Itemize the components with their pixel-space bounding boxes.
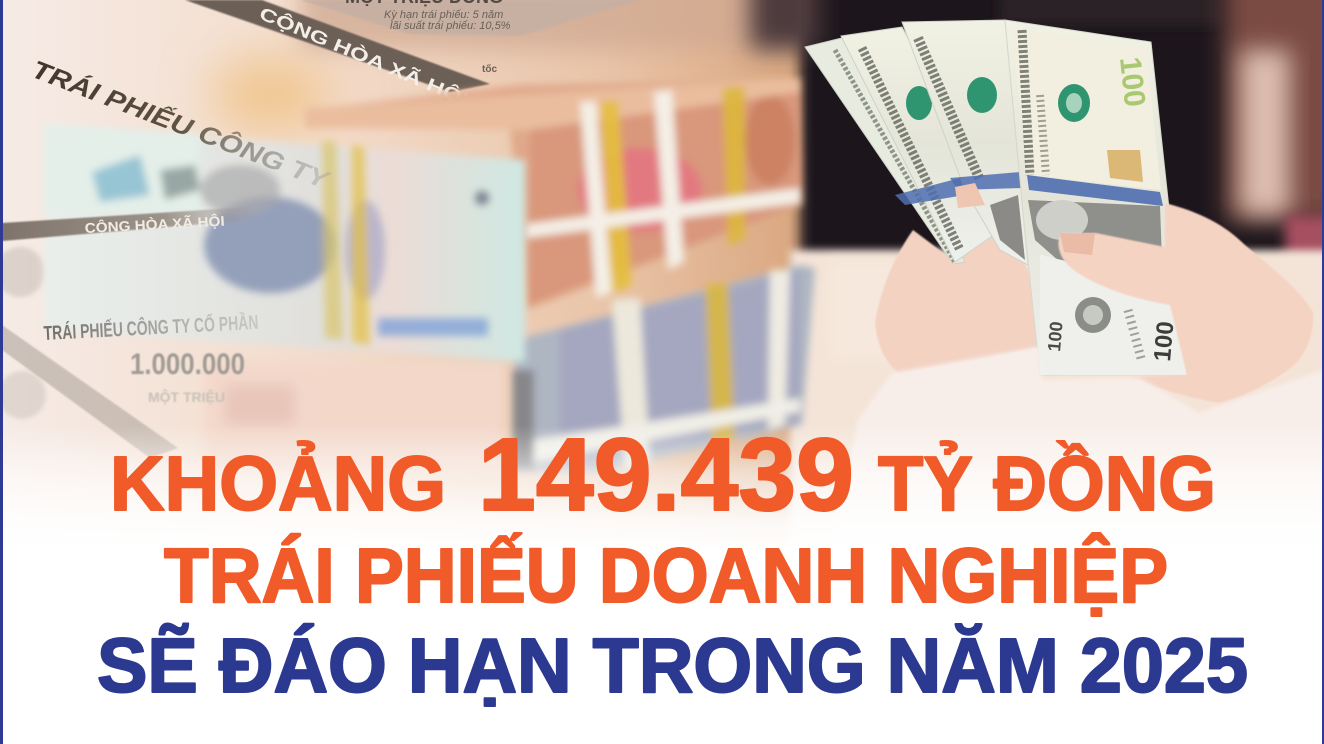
bond labels over the stack: 1.000.000 xyxy=(130,348,245,381)
lower pink bundle xyxy=(205,362,505,472)
background: dark blurred backdrop and table xyxy=(750,0,1324,570)
bond labels over the stack: TRÁI PHIẾU CÔNG TY CỔ PHẦN xyxy=(43,310,259,345)
sleeves xyxy=(830,347,1324,560)
bond labels over the stack xyxy=(2,54,335,405)
background: bond paper xyxy=(0,0,820,560)
headline line 3: SẼ ĐÁO HẠN TRONG NĂM 2025 xyxy=(97,622,1248,709)
bond certificate stripes, upper: tốc xyxy=(482,63,497,75)
bond labels over the stack: TRÁI PHIẾU CÔNG TY xyxy=(28,54,335,195)
lower banknote bundle xyxy=(512,265,815,472)
front blurred banknote stack xyxy=(45,125,525,362)
headline line 2: TRÁI PHIẾU DOANH NGHIỆP xyxy=(164,532,1168,619)
white fade behind headline xyxy=(0,425,1324,550)
dollar bill 4: 100 xyxy=(1044,321,1067,352)
headline line 1: KHOẢNG xyxy=(110,440,446,527)
left hand xyxy=(875,182,1039,373)
bond certificate stripes, upper: CỘNG HÒA XÃ HỘI xyxy=(256,2,472,110)
headline xyxy=(97,417,1248,709)
headline line 1: 149.439 xyxy=(478,417,854,532)
right hand xyxy=(1058,203,1313,403)
dollar bill 4: 100 xyxy=(1113,55,1151,109)
bond certificate stripes, upper xyxy=(0,0,640,458)
headline line 1 xyxy=(110,417,1216,532)
dollar bill 4 xyxy=(1005,20,1187,375)
dollar bill 2 xyxy=(841,27,1008,262)
headline line 1: TỶ ĐỒNG xyxy=(878,440,1216,527)
bond certificate stripes, upper: lãi suất trái phiếu: 10,5% xyxy=(390,20,511,32)
bond labels over the stack: CỘNG HÒA XÃ HỘI xyxy=(84,212,225,236)
upper banknote bundle xyxy=(305,78,802,310)
bond labels over the stack: MỘT TRIỆU xyxy=(148,388,225,405)
bond certificate stripes, upper: Kỳ hạn trái phiếu: 5 năm xyxy=(384,9,503,21)
dollar bill 4: 100 xyxy=(1149,320,1179,363)
dollar bill 3 xyxy=(902,20,1028,265)
dollar bill 1 xyxy=(805,38,965,264)
hands holding dollar bills xyxy=(805,20,1324,560)
fingernails xyxy=(1060,233,1095,255)
